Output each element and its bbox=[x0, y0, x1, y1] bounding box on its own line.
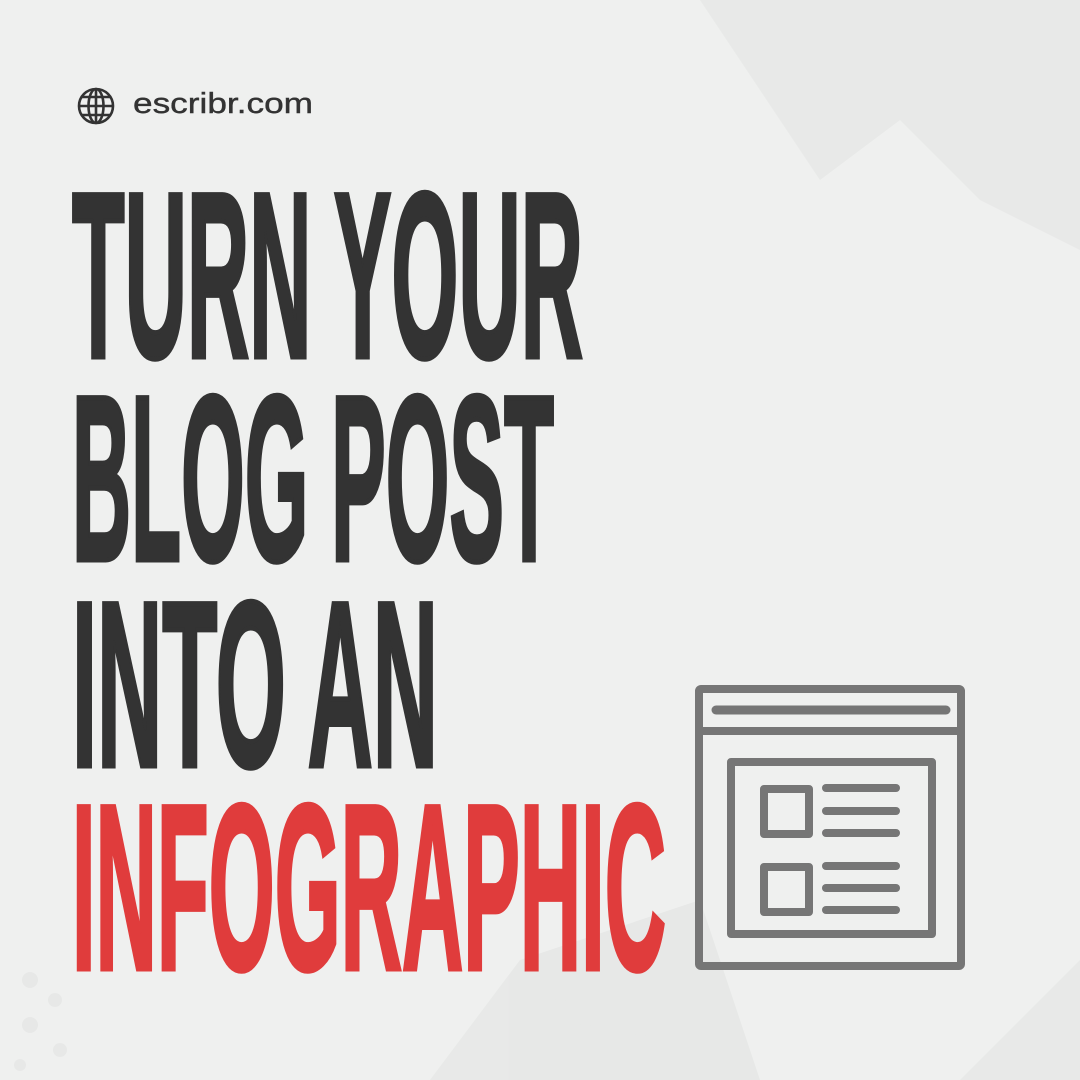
title: INTO AN bbox=[72, 553, 438, 817]
logo text: escribr.com bbox=[133, 88, 313, 120]
title bbox=[72, 144, 666, 1020]
icon: browser window with layout bbox=[699, 689, 961, 966]
logo: globe icon bbox=[79, 89, 113, 123]
